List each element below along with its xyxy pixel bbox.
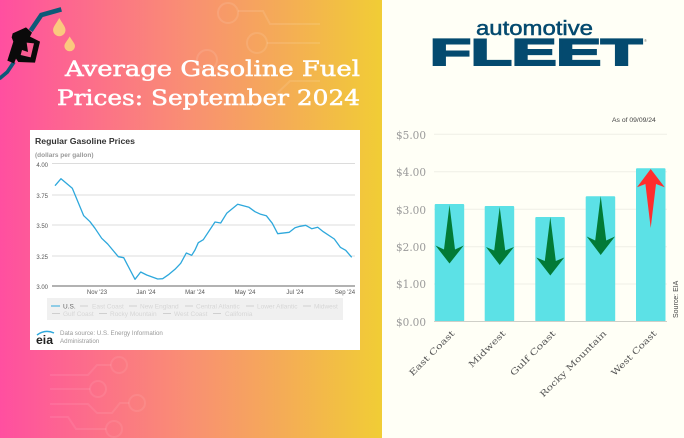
y axis labels: 3.75: [36, 194, 49, 200]
chart heading: Regular Gasoline Prices: [35, 136, 135, 146]
bar chart y axis labels: [396, 129, 426, 329]
y axis labels: 4.00: [36, 163, 49, 169]
data source note: [60, 330, 163, 345]
legend: East Coast: [92, 304, 124, 310]
eia logo: eia: [36, 333, 53, 347]
bar chart category labels: Rocky Mountain: [538, 329, 610, 400]
x axis labels: Jan '24: [136, 290, 156, 296]
x axis labels: Nov '23: [87, 290, 108, 296]
title: [57, 57, 360, 110]
x axis labels: Mar '24: [185, 290, 206, 296]
as-of date note: As of 09/09/24: [612, 117, 656, 124]
bar chart y axis labels: $2.00: [396, 241, 426, 254]
bar chart category labels: East Coast: [408, 329, 458, 379]
arrow: east coast down: [436, 205, 464, 264]
bar chart category labels: Midwest: [467, 329, 509, 370]
panel: gradient title panel: [0, 0, 382, 438]
bar chart grid lines: [434, 134, 667, 284]
bar chart bars: [435, 168, 666, 322]
data source note: Data source: U.S. Energy Information: [60, 330, 163, 337]
legend: Midwest: [314, 304, 338, 310]
logo: automotive fleet: FLEET: [430, 32, 643, 73]
bar chart category labels: West Coast: [610, 329, 660, 379]
bar chart y axis labels: $4.00: [396, 166, 426, 179]
y axis labels: 3.50: [36, 224, 49, 230]
panel: right chart background: [382, 0, 684, 438]
legend: New England: [140, 304, 179, 310]
legend: Lower Atlantic: [257, 304, 298, 310]
legend: Central Atlantic: [196, 304, 240, 310]
grid lines: [52, 164, 355, 256]
price line: [55, 179, 352, 279]
bar chart y axis labels: $5.00: [396, 129, 426, 142]
panel: regular gasoline line chart card: [30, 130, 360, 350]
y axis labels: 3.00: [36, 285, 49, 291]
legend: West Coast: [174, 311, 208, 318]
x axis labels: May '24: [235, 290, 256, 296]
arrow: rocky mountain down: [587, 196, 615, 255]
icon: fuel drops: [53, 18, 75, 51]
title: Average Gasoline Fuel: [64, 57, 360, 81]
circuit decoration bottom: [50, 357, 145, 437]
source note: Source: EIA: [673, 280, 680, 318]
chart unit label: (dollars per gallon): [35, 152, 94, 159]
bar chart category labels: Gulf Coast: [509, 329, 559, 379]
arrow: west coast up: [637, 169, 665, 228]
x axis labels: Jul '24: [286, 290, 304, 296]
bar chart y axis labels: $3.00: [396, 204, 426, 217]
legend: U.S.: [63, 304, 76, 310]
icon: fuel pump nozzle: [0, 9, 61, 79]
legend: Rocky Mountain: [110, 311, 157, 318]
bar chart y axis labels: $1.00: [396, 278, 426, 291]
legend: Gulf Coast: [63, 311, 94, 318]
title: Prices: September 2024: [57, 86, 360, 110]
circuit decoration top: [197, 3, 320, 100]
y axis labels: 3.25: [36, 255, 49, 261]
x axis labels: [87, 290, 356, 296]
data source note: Administration: [60, 338, 100, 345]
arrow: midwest down: [486, 207, 514, 265]
arrow: gulf coast down: [536, 217, 564, 276]
bar chart y axis labels: $0.00: [396, 316, 426, 329]
y axis labels: [36, 163, 49, 291]
legend: [47, 298, 343, 320]
legend: California: [225, 311, 253, 318]
logo: automotive fleet: ®: [644, 38, 647, 43]
bar chart category labels: [408, 329, 660, 400]
logo: automotive fleet: [430, 18, 647, 73]
x axis labels: Sep '24: [335, 290, 356, 296]
logo: automotive fleet: automotive: [476, 18, 593, 40]
